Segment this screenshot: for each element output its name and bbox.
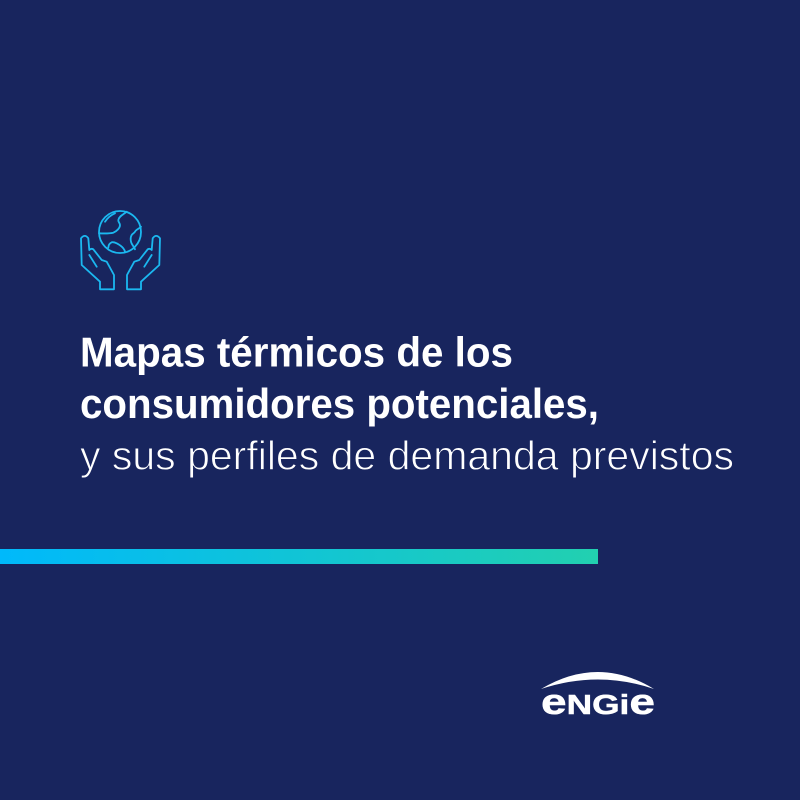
title: y sus perfiles de demanda previstos	[80, 432, 734, 478]
gradient bar	[0, 549, 598, 564]
title: consumidores potenciales,	[80, 380, 599, 427]
title	[80, 328, 734, 478]
logo: ENGIE: eNG ie	[541, 681, 655, 722]
title: Mapas térmicos de los	[80, 328, 513, 376]
icon: hands holding globe	[81, 211, 160, 289]
